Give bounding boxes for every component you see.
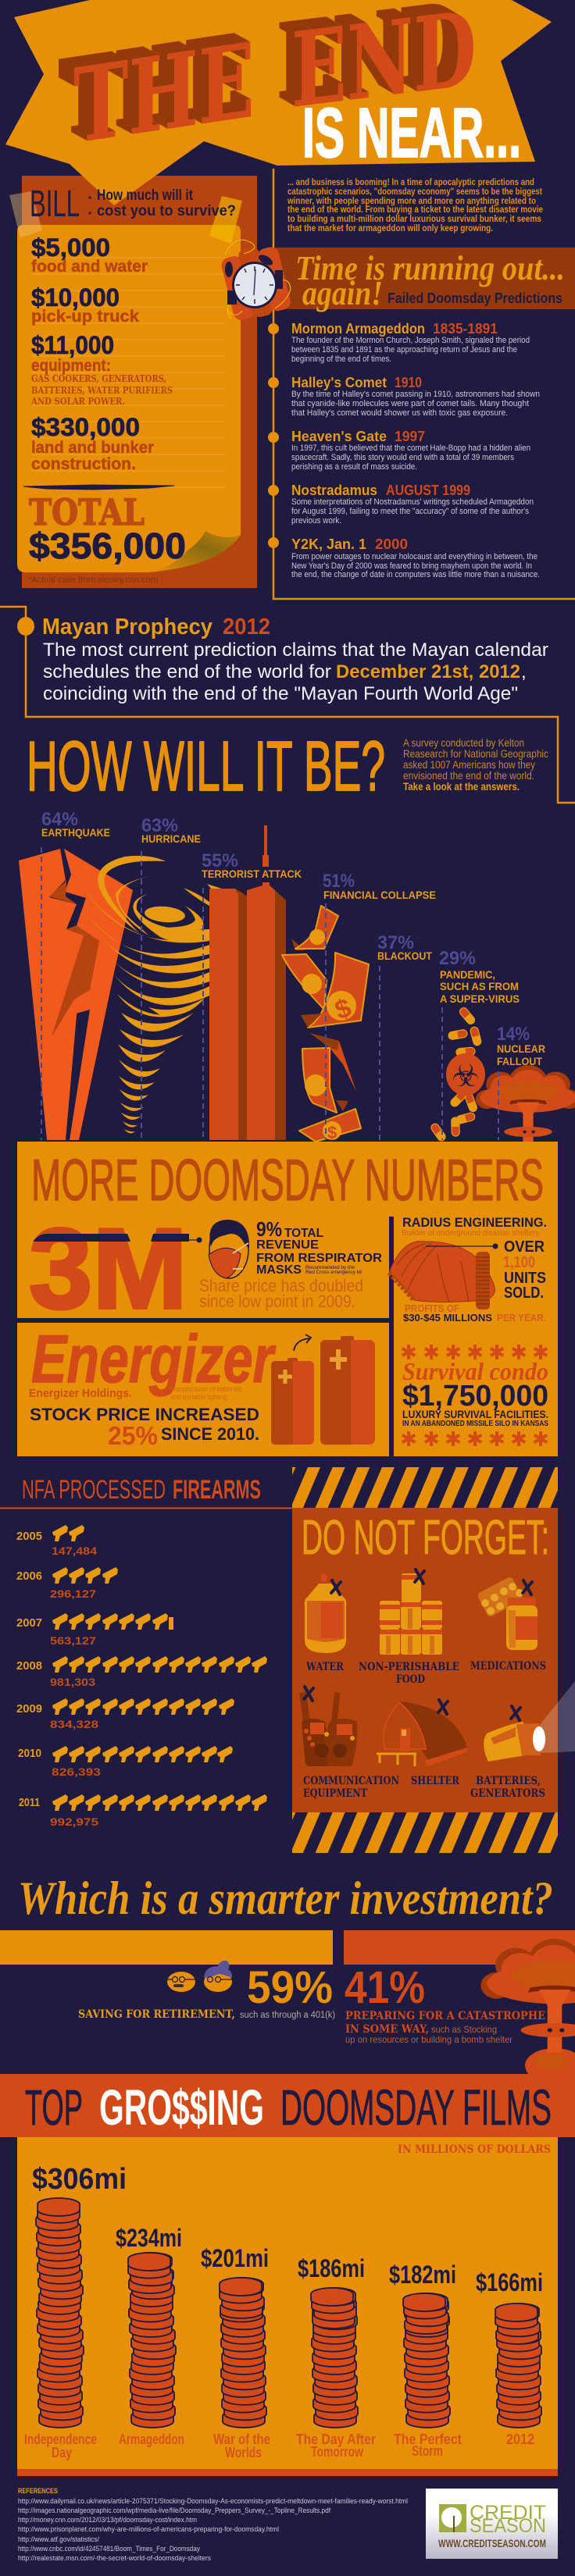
note paper xyxy=(17,225,241,572)
bill bullets xyxy=(89,198,91,213)
row 2010 xyxy=(18,1746,233,1778)
timeline item: Y2K: Y2K, Jan. 1 xyxy=(291,536,366,552)
labels: FOOD xyxy=(396,1673,425,1686)
heading: firearms xyxy=(0,1475,292,1509)
chart percentages: 63% xyxy=(141,815,178,836)
timeline item: Halley: 1910 xyxy=(395,375,422,390)
survival condo: ✱ xyxy=(488,1428,505,1452)
stack: The Perfect Storm xyxy=(389,2261,462,2459)
intro text: to building a multi-million dollar luxurious survival bunker, it seems xyxy=(288,215,541,224)
chart percentages: 55% xyxy=(202,850,238,871)
stack: War of the Worlds: $201mi xyxy=(201,2244,269,2272)
survey text xyxy=(403,737,548,793)
survival condo: ✱ xyxy=(510,1341,527,1365)
survey text: envisioned the end of the world. xyxy=(403,770,534,782)
intro text: ... and business is booming! In a time of apocalyptic predictions and xyxy=(288,178,534,187)
timeline item: Heaven's Gate: Heaven's Gate xyxy=(291,429,387,444)
chart percentages: 29% xyxy=(439,948,476,969)
survival condo: ✱ xyxy=(423,1341,440,1365)
panel: films chart xyxy=(17,2137,558,2476)
chart labels: A SUPER-VIRUS xyxy=(440,992,520,1005)
labels: BATTERIES, xyxy=(476,1775,541,1787)
bar: catastrophe xyxy=(344,1930,575,1965)
stack: Independence Day xyxy=(24,2163,127,2460)
survival condo: ✱ xyxy=(532,1428,549,1452)
stack: The Day After Tomorrow xyxy=(296,2254,376,2460)
stack: War of the Worlds xyxy=(201,2244,270,2460)
panel: investment split: IN SOME WAY, xyxy=(345,2023,429,2036)
timeline item: Y2K: New Year's Day of 2000 was feared to bring mayhem upon the world. In xyxy=(291,561,532,571)
icon: retiree woman xyxy=(204,1961,232,1992)
chart labels: HURRICANE xyxy=(141,832,201,845)
chart: pills and biohazard xyxy=(430,1007,485,1142)
panel: mayan prophecy xyxy=(17,615,548,704)
references: http://www.dailymail.co.uk/news/article-2075371/Stocking-Doomsday-As-economists-predict-meltdown-meet-families-ready-worst.html xyxy=(18,2497,408,2506)
chart: hurricane xyxy=(84,856,209,1133)
panel: bill note: construction. xyxy=(31,455,136,473)
heading: firearms: FIREARMS xyxy=(173,1475,261,1505)
timeline item: Y2K: 2000 xyxy=(375,536,408,552)
timeline item: Halley xyxy=(268,375,540,418)
row 2009 xyxy=(16,1698,234,1730)
timeline item: Heaven's Gate xyxy=(268,429,530,472)
labels: GENERATORS xyxy=(470,1787,545,1800)
row 2006: 296,127 xyxy=(50,1587,96,1600)
chart labels: EARTHQUAKE xyxy=(41,826,110,839)
band: time is running out xyxy=(273,248,575,312)
radius engineering: PER YEAR. xyxy=(497,1312,546,1324)
stack: War of the Worlds: Worlds xyxy=(225,2445,262,2460)
stack: Independence Day: Day xyxy=(52,2445,72,2460)
radius engineering: RADIUS ENGINEERING. xyxy=(402,1215,547,1230)
survival condo: ✱ xyxy=(488,1341,505,1365)
stack: The Day After Tomorrow: $186mi xyxy=(298,2254,365,2282)
timeline item: Halley: that Halley's comet would shower us with toxic gas exposure. xyxy=(291,408,508,418)
3M stats: Recommended by the xyxy=(305,1266,355,1270)
hazard stripes top xyxy=(292,1467,558,1508)
3M stats: 9% xyxy=(256,1217,282,1241)
3M stats: TOTAL xyxy=(284,1227,323,1240)
timeline item: Heaven's Gate: spacecraft. Sadly, this story would end with a total of 39 members xyxy=(291,453,514,462)
energizer xyxy=(29,1322,277,1450)
row 2006: 2006 xyxy=(16,1569,42,1583)
band: time is running out: again! xyxy=(302,274,383,312)
energizer: STOCK PRICE INCREASED xyxy=(30,1405,259,1424)
panel: investment split: such as Stocking xyxy=(431,2024,497,2035)
icon: bunker dome xyxy=(389,1242,498,1309)
row 2011: 2011 xyxy=(19,1796,40,1809)
panel: mayan prophecy: December 21st, 2012 xyxy=(336,661,520,682)
timeline item: Halley: Halley's Comet xyxy=(291,375,387,390)
survival condo: ✱ xyxy=(445,1341,462,1365)
dividers xyxy=(17,1318,389,1323)
references: http://www.atf.gov/statistics/ xyxy=(18,2535,99,2544)
icon: water xyxy=(305,1574,346,1653)
chart percentages xyxy=(41,809,530,1045)
survival condo: IN AN ABANDONED MISSILE SILO IN KANSAS xyxy=(402,1420,548,1428)
timeline item: Heaven's Gate: 1997 xyxy=(395,429,425,444)
timeline item: Nostradamus: AUGUST 1999 xyxy=(386,483,470,498)
panel: bill note: GAS COOKERS, GENERATORS, xyxy=(31,373,166,384)
chart labels: NUCLEAR xyxy=(497,1042,545,1055)
labels: NON-PERISHABLE xyxy=(359,1661,459,1673)
banner: top grossing doomsday films xyxy=(0,2074,575,2137)
panel: investment split: up on resources or building a bomb shelter xyxy=(345,2034,512,2045)
panel: mayan prophecy: schedules the end of the world for xyxy=(43,661,331,682)
cost: equipment: $11,000 xyxy=(31,331,114,359)
survival condo: ✱ xyxy=(423,1428,440,1452)
chart: firearms pictogram xyxy=(16,1525,267,1828)
icon: flashlight xyxy=(484,1681,575,1762)
chart percentages: 37% xyxy=(377,932,414,953)
mushroom cloud large xyxy=(480,1939,575,2083)
survival condo: ✱ xyxy=(445,1428,462,1452)
energizer: 25% xyxy=(108,1421,158,1450)
panel: mayan prophecy: , xyxy=(521,661,527,682)
panel: bill note: pick-up truck xyxy=(31,308,139,326)
3M stats: FROM RESPIRATOR xyxy=(256,1252,382,1265)
energizer: Energizer Holdings. xyxy=(29,1387,132,1400)
retirement text: SAVING FOR RETIREMENT, xyxy=(78,2008,235,2021)
row 2005: 2005 xyxy=(16,1530,42,1543)
row 2005: 147,484 xyxy=(52,1545,97,1557)
chart: falling money xyxy=(282,906,369,1142)
panel: bill note xyxy=(9,183,242,585)
panel: bill background xyxy=(22,176,257,588)
references: http://www.prisonplanet.com/why-are-millions-of-americans-preparing-for-doomsday.html xyxy=(18,2525,279,2534)
survival condo: Survival condo xyxy=(402,1357,548,1385)
panel: bill note: BATTERIES, WATER PURIFIERS xyxy=(31,385,173,396)
timeline item: Nostradamus: for August 1999, failing to meet the "accuracy" of some of the author's xyxy=(291,507,529,516)
text: $ xyxy=(327,1123,337,1142)
timeline item: Mormon xyxy=(268,321,530,364)
stack: The Day After Tomorrow: Tomorrow xyxy=(311,2444,364,2460)
note ruled lines xyxy=(31,258,225,487)
3M logo: 3M xyxy=(29,1205,188,1332)
icon: shelter xyxy=(377,1700,467,1766)
cost: land: $330,000 xyxy=(31,413,140,441)
survival condo: ✱ xyxy=(466,1341,484,1365)
chart labels: FALLOUT xyxy=(497,1055,542,1067)
logo: credit season: CREDIT xyxy=(470,2502,546,2524)
chart labels: PANDEMIC, xyxy=(440,968,495,981)
icon: cans xyxy=(380,1569,442,1655)
panel: mayan prophecy: The most current prediction claims that the Mayan calendar xyxy=(43,640,548,661)
banner: top grossing doomsday films: TOP xyxy=(25,2079,83,2136)
cost: truck: $10,000 xyxy=(31,283,120,312)
labels: COMMUNICATION xyxy=(303,1775,399,1787)
panel: investment split xyxy=(0,1930,575,2083)
survival condo: ✱ xyxy=(466,1428,484,1452)
chart percentages: 64% xyxy=(41,809,78,830)
panel: mayan prophecy: coinciding with the end of the "Mayan Fourth World Age" xyxy=(43,683,518,704)
row 2009: 2009 xyxy=(16,1702,42,1716)
bill heading: BILL xyxy=(30,183,80,225)
total: TOTAL xyxy=(29,491,145,533)
stack: The Perfect Storm: The Perfect xyxy=(394,2432,462,2447)
panel: mayan prophecy: 2012 xyxy=(223,615,270,640)
survival condo: ✱ xyxy=(400,1428,417,1452)
survey text: asked 1007 Americans how they xyxy=(403,759,535,771)
stack: The Perfect Storm: $182mi xyxy=(389,2261,456,2289)
row 2011 xyxy=(19,1794,267,1828)
logo: credit season: SEASON xyxy=(470,2515,546,2537)
title: THE: THE xyxy=(73,20,255,168)
timeline item: Y2K: the end, the change of date in computers was little more than a nuisance. xyxy=(291,570,540,579)
energizer: SINCE 2010. xyxy=(161,1424,259,1444)
stack: The Perfect Storm: Storm xyxy=(412,2443,443,2459)
mayan connector line xyxy=(0,607,575,803)
survey text: Take a look at the answers. xyxy=(403,781,520,793)
stack: Armageddon: Armageddon xyxy=(119,2432,184,2447)
radius engineering xyxy=(389,1215,547,1324)
timeline item: Heaven's Gate: perishing as a result of mass suicide. xyxy=(291,462,417,472)
source note: *Actual case from money.cnn.com xyxy=(28,575,158,585)
timeline item: Nostradamus: Some interpretations of Nostradamus' writings scheduled Armageddon xyxy=(291,497,534,507)
panel: do not forget xyxy=(292,1467,575,1853)
stack: 2012 xyxy=(476,2268,543,2447)
heading: firearms: NFA PROCESSED xyxy=(22,1475,166,1505)
chart percentages: 14% xyxy=(497,1024,530,1045)
panel: bill note: land and bunker xyxy=(31,439,154,457)
timeline item: Mormon: The founder of the Mormon Church, Joseph Smith, signaled the period xyxy=(291,336,530,345)
stat: 41: 41% xyxy=(345,1962,425,2013)
energizer: Manufacturer of batteries xyxy=(170,1385,241,1393)
timeline item: Nostradamus: Nostradamus xyxy=(291,483,377,498)
timeline item: Nostradamus xyxy=(268,483,534,526)
stack: 2012: $166mi xyxy=(476,2268,543,2296)
3M stats: Red Cross emergency kit xyxy=(305,1270,362,1275)
icon: batteries xyxy=(271,1334,375,1445)
logo: credit season xyxy=(426,2489,558,2559)
row 2009: 834,328 xyxy=(50,1718,98,1730)
timeline item: Mormon: 1835-1891 xyxy=(433,321,498,337)
survey text: A survey conducted by Kelton xyxy=(403,737,524,749)
survival condo: LUXURY SURVIVAL FACILITIES. xyxy=(402,1408,548,1420)
survival condo: ✱ xyxy=(532,1341,549,1365)
row 2008: 981,303 xyxy=(50,1676,95,1688)
row 2006 xyxy=(16,1567,118,1600)
stack: Independence Day: $306mi xyxy=(32,2163,127,2196)
panel: investment split: such as through a 401(k) xyxy=(240,2011,335,2020)
survey dashed guides xyxy=(41,847,498,1140)
timeline item: Halley: By the time of Halley's comet passing in 1910, astronomers had shown xyxy=(291,390,540,399)
3M share price: Share price has doubled xyxy=(199,1276,363,1295)
chart labels: FINANCIAL COLLAPSE xyxy=(323,889,436,901)
stack: Armageddon: $234mi xyxy=(116,2224,182,2252)
intro text: that the market for armageddon will only keep growing. xyxy=(288,224,493,233)
row 2011: 992,975 xyxy=(50,1815,98,1828)
tape right xyxy=(209,196,242,244)
references: http://money.cnn.com/2012/03/13/pf/doomsday-cost/index.htm xyxy=(18,2516,197,2524)
panel: bill note: cost you to survive? xyxy=(97,203,236,219)
3M stats xyxy=(256,1217,382,1277)
banner: top grossing doomsday films: GRO$$ING xyxy=(99,2079,264,2136)
references: http://images.nationalgeographic.com/wpf/media-live/file/Doomsday_Preppers_Survey_-_Topline_Results.pdf xyxy=(18,2507,330,2515)
row 2010: 2010 xyxy=(18,1747,41,1760)
labels: WATER xyxy=(305,1661,345,1673)
references xyxy=(18,2487,408,2563)
radius engineering: OVER xyxy=(504,1238,545,1256)
chart: mushroom cloud xyxy=(476,1065,575,1148)
survey text: Reasearch for National Geographic xyxy=(403,748,548,760)
radius engineering: 1,100 xyxy=(503,1254,535,1271)
radius engineering: UNITS xyxy=(504,1270,546,1287)
money dollar signs: $ xyxy=(331,992,355,1026)
panel: bill note: $356,000 xyxy=(29,526,186,566)
3M stats: MASKS xyxy=(256,1263,302,1277)
labels: MEDICATIONS xyxy=(470,1660,546,1673)
panel: more doomsday numbers: since low point in 2009. xyxy=(199,1292,355,1311)
scribble xyxy=(23,485,174,490)
labels xyxy=(303,1660,546,1800)
timeline item: Y2K xyxy=(268,536,540,579)
header starburst xyxy=(5,0,552,205)
panel: mayan prophecy: Mayan Prophecy xyxy=(42,615,212,640)
references: http://www.cnbc.com/id/42457481/Boom_Times_For_Doomsday xyxy=(18,2545,200,2553)
chart labels: BLACKOUT xyxy=(377,950,432,962)
radius engineering: SOLD. xyxy=(504,1284,544,1302)
radius engineering: Builder of underground disaster shelters xyxy=(402,1229,539,1238)
timeline item: Halley: that cyanide-like molecules were part of comet tails. Many thought xyxy=(291,399,529,408)
panel: more doomsday numbers xyxy=(17,1142,558,1456)
stack: Independence Day: Independence xyxy=(24,2432,97,2447)
stack: War of the Worlds: War of the xyxy=(213,2432,270,2447)
row 2007 xyxy=(16,1613,173,1647)
chart: towers xyxy=(207,825,286,1140)
survival condo: ✱ xyxy=(510,1428,527,1452)
cost: food: $5,000 xyxy=(31,233,110,262)
note curl xyxy=(148,531,241,572)
chart: earthquake xyxy=(19,849,133,1140)
labels: EQUIPMENT xyxy=(303,1787,367,1800)
icon: radios xyxy=(299,1687,357,1766)
references: http://realestate.msn.com/-the-secret-world-of-doomsday-shelters xyxy=(18,2554,211,2563)
radius engineering: PROFITS OF xyxy=(405,1302,459,1314)
timeline item: Mormon: between 1835 and 1891 as the approaching return of Jesus and the xyxy=(291,345,517,355)
energizer: and portable lighting. xyxy=(170,1393,229,1401)
survival condo: $1,750,000 xyxy=(402,1380,548,1413)
icon: masked face xyxy=(209,1220,249,1278)
row 2008 xyxy=(16,1656,267,1688)
timeline item: Mormon: beginning of the end of times. xyxy=(291,355,391,364)
stack: The Day After Tomorrow: The Day After xyxy=(296,2432,376,2447)
unit label: IN MILLIONS OF DOLLARS xyxy=(398,2143,551,2156)
timeline item: Heaven's Gate: In 1997, this cult believed that the comet Hale-Bopp had a hidden alien xyxy=(291,444,530,453)
chart percentages: 51% xyxy=(323,871,355,892)
panel: bill note: AND SOLAR POWER. xyxy=(30,396,125,407)
radius engineering: $30-$45 MILLIONS xyxy=(403,1312,492,1324)
timeline item: Y2K: From power outages to nuclear holocaust and everything in between, the xyxy=(291,552,538,561)
stat: 59: 59% xyxy=(247,1962,333,2013)
references: REFERENCES xyxy=(18,2487,58,2496)
hazard stripes bottom xyxy=(292,1812,558,1853)
panel: bill note: food and water xyxy=(31,258,148,276)
icon: medications xyxy=(477,1576,538,1650)
chart: pills and biohazard: ☣ xyxy=(452,1058,480,1094)
chart labels: SUCH AS FROM xyxy=(440,980,519,992)
energizer: Energizer xyxy=(31,1322,277,1397)
timeline item: Mormon: Mormon Armageddon xyxy=(291,321,425,337)
survival condo: ✱ xyxy=(400,1341,417,1365)
bill subtitle: How much will it xyxy=(97,187,194,204)
timeline item: Nostradamus: previous work. xyxy=(291,516,341,526)
row 2007: 563,127 xyxy=(50,1634,96,1647)
intro text xyxy=(287,178,543,233)
row 2005 xyxy=(16,1525,97,1557)
tape left xyxy=(9,191,42,238)
catastrophe text: PREPARING FOR A CATASTROPHE xyxy=(345,2010,545,2022)
panel: bill note: equipment: xyxy=(31,357,111,375)
row 2007: 2007 xyxy=(16,1616,42,1630)
chart labels: TERRORIST ATTACK xyxy=(202,868,302,880)
icon: bomb clock xyxy=(219,240,293,323)
row 2010: 826,393 xyxy=(52,1765,101,1778)
3M stats: REVENUE xyxy=(256,1238,319,1252)
chart labels xyxy=(41,826,545,1067)
timeline line xyxy=(273,169,575,599)
icon: retiree man xyxy=(167,1972,195,1992)
row 2008: 2008 xyxy=(16,1659,42,1673)
stack: Armageddon xyxy=(116,2224,184,2447)
labels: SHELTER xyxy=(411,1775,460,1787)
intro text: winner, with people spending more and more on anything related to xyxy=(287,197,536,206)
stack: 2012: 2012 xyxy=(506,2432,534,2447)
survival condo xyxy=(400,1341,549,1452)
bar: retirement xyxy=(0,1930,333,1965)
